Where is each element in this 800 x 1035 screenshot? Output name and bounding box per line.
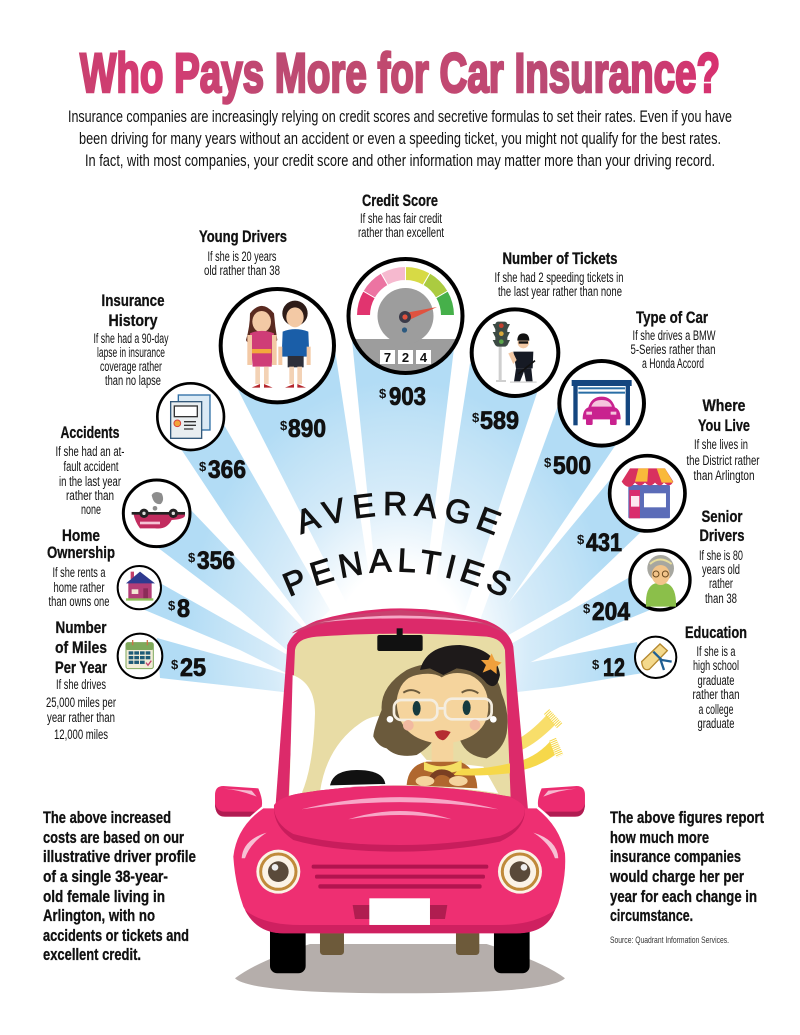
intro text xyxy=(68,107,732,170)
description: accidents: none xyxy=(81,502,101,517)
heading: where you live xyxy=(698,397,750,435)
description: senior drivers: If she is 80 xyxy=(699,548,743,563)
description: number of tickets: If she had 2 speeding tickets in xyxy=(494,270,624,285)
description: where you live: than Arlington xyxy=(694,468,754,483)
description: senior drivers: rather xyxy=(709,576,733,591)
icon: older woman xyxy=(630,550,690,610)
body highlights xyxy=(242,833,558,858)
description: number of miles per year xyxy=(46,677,116,742)
description: home ownership: home rather xyxy=(54,580,105,595)
value: home ownership: $ xyxy=(168,598,176,613)
heading: senior drivers: Drivers xyxy=(700,527,744,545)
license plate xyxy=(353,898,447,925)
description: education: a college xyxy=(698,702,734,717)
icon: calendar xyxy=(118,634,162,678)
value: education: 12 xyxy=(603,654,625,682)
description: accidents: rather than xyxy=(66,488,114,503)
text block: how figures are reported: year for each change in xyxy=(610,888,757,906)
panel: young drivers xyxy=(199,228,334,443)
value: education: $ xyxy=(592,657,600,672)
panel: insurance history xyxy=(94,292,246,484)
heading: insurance history: History xyxy=(108,312,158,330)
value: number of tickets: $ xyxy=(472,410,480,425)
text block: how figures are reported: The above figures report xyxy=(610,809,764,827)
heading: number of miles per year: Number xyxy=(56,619,107,637)
icon: credit score gauge: 4 xyxy=(420,350,428,365)
description: education xyxy=(692,644,740,731)
windscreen xyxy=(289,634,511,798)
description: accidents: in the last year xyxy=(59,474,121,489)
heading: insurance history xyxy=(102,292,164,330)
icon: insurance documents xyxy=(157,383,224,450)
light rays behind the circles xyxy=(140,340,650,694)
description: insurance history: than no lapse xyxy=(105,373,161,388)
value: young drivers: $ xyxy=(280,418,288,433)
value: where you live: $ xyxy=(577,532,585,547)
heading: senior drivers xyxy=(700,508,744,545)
text block: driver profile note: costs are based on our xyxy=(43,829,184,847)
icon: diploma scroll xyxy=(635,637,676,678)
rear-view mirror xyxy=(377,628,423,651)
description: credit score: If she has fair credit xyxy=(360,211,442,226)
left headlight xyxy=(256,850,300,894)
description: accidents xyxy=(56,444,124,517)
description: senior drivers xyxy=(699,548,743,606)
side mirrors xyxy=(215,786,585,817)
icon: overturned car xyxy=(123,480,190,547)
description: education: graduate xyxy=(698,716,734,731)
text block: driver profile note: accidents or tickets and xyxy=(43,927,189,945)
panel: credit score xyxy=(345,192,467,411)
car body xyxy=(233,808,565,933)
heading: type of car: Type of Car xyxy=(636,309,708,327)
text block: how figures are reported xyxy=(609,809,764,925)
text block: how figures are reported: insurance companies xyxy=(610,848,741,866)
description: credit score xyxy=(358,211,444,240)
description: education: high school xyxy=(693,658,739,673)
heading: average penalties xyxy=(282,492,510,596)
description: number of miles per year: If she drives xyxy=(56,677,106,692)
panel: home ownership xyxy=(47,527,190,623)
description: insurance history: coverage rather xyxy=(100,359,162,374)
description: senior drivers: than 38 xyxy=(705,591,737,606)
text block: driver profile note: Arlington, with no xyxy=(43,907,155,925)
description: education: rather than xyxy=(692,687,740,702)
icon: traffic light and police officer xyxy=(472,309,558,396)
description: young drivers xyxy=(204,249,280,278)
steering wheel and hands xyxy=(416,769,468,786)
panel: senior drivers xyxy=(583,508,744,626)
heading: number of miles per year xyxy=(55,619,107,677)
scarf tails xyxy=(510,712,560,772)
description: credit score: rather than excellent xyxy=(358,225,444,240)
hood xyxy=(274,786,525,852)
value: number of miles per year: $ xyxy=(171,657,179,672)
description: type of car: 5-Series rather than xyxy=(630,342,716,357)
heading: senior drivers: Senior xyxy=(702,508,743,526)
panel: number of miles per year xyxy=(46,619,206,742)
value: credit score: 903 xyxy=(389,383,426,411)
value: senior drivers: $ xyxy=(583,601,591,616)
source note: Source: Quadrant Information Services. xyxy=(610,935,729,946)
heading: home ownership: Home xyxy=(62,527,100,545)
heading: young drivers: Young Drivers xyxy=(199,228,287,246)
passenger headrest xyxy=(330,770,385,785)
text block: how figures are reported: would charge her per xyxy=(609,868,744,886)
illustration: woman driving a pink car xyxy=(215,608,585,993)
grille xyxy=(312,865,488,889)
description: education: graduate xyxy=(698,673,734,688)
text block: how figures are reported: circumstance. xyxy=(610,907,693,925)
description: insurance history xyxy=(94,331,169,388)
cab frame xyxy=(275,608,528,813)
heading: where you live: Where xyxy=(702,397,746,415)
description: home ownership: than owns one xyxy=(48,594,110,609)
panel: type of car xyxy=(544,309,716,480)
value: where you live: 431 xyxy=(586,529,622,557)
description: young drivers: old rather than 38 xyxy=(204,263,280,278)
panel: education xyxy=(592,624,747,731)
panel: accidents xyxy=(56,424,235,575)
right headlight xyxy=(498,850,542,894)
text block: how figures are reported: how much more xyxy=(610,829,709,847)
value: senior drivers: 204 xyxy=(592,598,630,626)
value: type of car: $ xyxy=(544,455,552,470)
text block: driver profile note xyxy=(43,809,196,964)
icon: credit score gauge: 2 xyxy=(402,350,409,365)
heading: number of miles per year: of Miles xyxy=(55,639,107,657)
text block: driver profile note: excellent credit. xyxy=(43,946,141,964)
description: type of car: a Honda Accord xyxy=(642,356,704,371)
heading: average penalties: PENALTIES xyxy=(282,548,510,596)
description: where you live: If she lives in xyxy=(694,437,748,452)
description: type of car: If she drives a BMW xyxy=(632,328,716,343)
ground shadow xyxy=(235,944,565,993)
heading: insurance history: Insurance xyxy=(102,292,164,310)
heading: home ownership xyxy=(47,527,115,562)
heading: education: Education xyxy=(685,624,747,642)
heading: accidents: Accidents xyxy=(60,424,120,442)
value: credit score: $ xyxy=(379,386,387,401)
value: young drivers: 890 xyxy=(288,415,326,443)
icon: two young women xyxy=(221,289,334,402)
description: home ownership: If she rents a xyxy=(52,565,106,580)
icon: credit score gauge xyxy=(345,259,467,379)
value: education xyxy=(592,654,625,682)
value: number of miles per year: 25 xyxy=(180,654,206,682)
description: number of tickets xyxy=(494,270,624,299)
description: type of car xyxy=(630,328,716,371)
wheels xyxy=(270,920,530,973)
value: insurance history: $ xyxy=(199,459,207,474)
heading: average penalties: AVERAGE xyxy=(300,492,502,536)
icon: house xyxy=(118,566,161,609)
text block: driver profile note: illustrative driver profile xyxy=(43,848,196,866)
heading: number of miles per year: Per Year xyxy=(55,659,107,677)
value: type of car: 500 xyxy=(553,452,591,480)
description: insurance history: If she had a 90-day xyxy=(94,331,169,346)
text block: driver profile note: The above increased xyxy=(43,809,171,827)
value: home ownership xyxy=(168,595,190,623)
description: senior drivers: years old xyxy=(702,562,740,577)
description: where you live xyxy=(686,437,760,483)
description: accidents: If she had an at- xyxy=(56,444,124,459)
icon: storefront xyxy=(610,456,685,531)
description: home ownership xyxy=(48,565,110,609)
driver xyxy=(373,645,510,788)
value: number of tickets: 589 xyxy=(480,407,519,435)
panel: where you live xyxy=(577,397,760,557)
description: where you live: the District rather xyxy=(686,453,760,468)
heading: number of tickets: Number of Tickets xyxy=(502,250,618,268)
description: education: If she is a xyxy=(696,644,736,659)
icon: car in a garage xyxy=(559,361,644,446)
heading: where you live: You Live xyxy=(698,417,750,435)
description: young drivers: If she is 20 years xyxy=(208,249,277,264)
description: number of miles per year: year rather than xyxy=(47,710,115,725)
value: accidents: 356 xyxy=(197,547,235,575)
seats xyxy=(289,675,498,797)
heading: credit score: Credit Score xyxy=(362,192,438,210)
icon: credit score gauge: 7 xyxy=(384,350,391,365)
text block: driver profile note: old female living in xyxy=(43,888,165,906)
description: number of miles per year: 25,000 miles per xyxy=(46,695,116,710)
value: insurance history: 366 xyxy=(208,456,246,484)
value: home ownership: 8 xyxy=(177,595,190,623)
description: number of tickets: the last year rather than none xyxy=(498,284,622,299)
description: insurance history: lapse in insurance xyxy=(97,345,165,360)
description: number of miles per year: 12,000 miles xyxy=(54,727,108,742)
description: accidents: fault accident xyxy=(64,459,119,474)
value: accidents: $ xyxy=(188,550,196,565)
heading: home ownership: Ownership xyxy=(47,544,115,562)
text block: driver profile note: of a single 38-year- xyxy=(43,868,168,886)
panel: number of tickets xyxy=(472,250,624,435)
